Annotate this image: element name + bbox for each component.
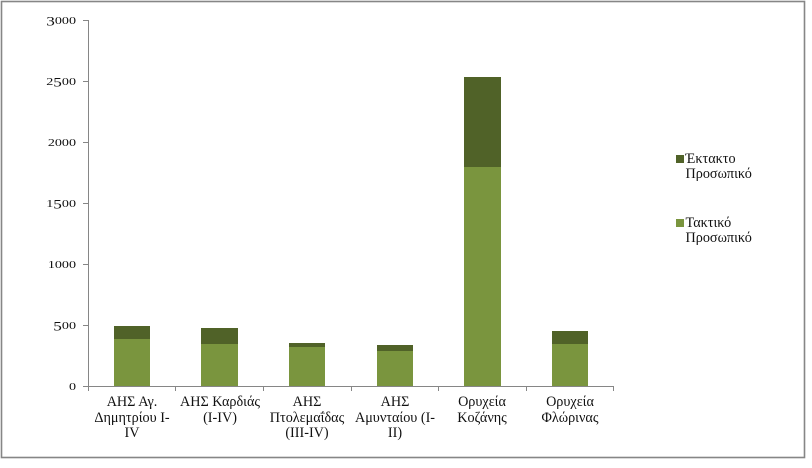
y axis labels: 00 — [62, 320, 76, 331]
label: ΑΗΣ Καρδιάς (I-IV): (I-IV) — [203, 410, 237, 426]
legend item: Τακτικό Προσωπικό — [676, 215, 752, 246]
bar: Ορυχεία Κοζάνης — [464, 77, 501, 386]
y axis labels: 2 — [46, 76, 53, 87]
y axis labels: 5 — [53, 199, 62, 212]
legend — [676, 151, 752, 246]
label: Ορυχεία Φλώρινας: Φλώρινας — [542, 410, 599, 426]
label: ΑΗΣ Αμυνταίου (I-II): ΑΗΣ — [381, 394, 409, 410]
legend item: Έκτακτο Προσωπικό: Έκτακτο — [684, 151, 736, 167]
y axis labels: 5 — [53, 321, 62, 334]
label: ΑΗΣ Πτολεμαΐδας (III-IV): Πτολεμαΐδας — [270, 410, 345, 426]
x axis labels — [94, 394, 599, 441]
bar: ΑΗΣ Πτολεμαΐδας — [289, 343, 325, 386]
label: Ορυχεία Κοζάνης: Κοζάνης — [457, 410, 507, 426]
y axis labels: 00 — [62, 76, 76, 87]
y axis labels: 0 — [69, 381, 76, 392]
label: ΑΗΣ Αμυνταίου (I-II): II) — [388, 425, 402, 441]
label: Ορυχεία Φλώρινας: Ορυχεία — [546, 394, 594, 410]
y axis labels: 1000 — [48, 259, 76, 270]
legend item: Έκτακτο Προσωπικό: Προσωπικό — [686, 166, 752, 182]
legend item: Τακτικό Προσωπικό: Τακτικό — [686, 215, 731, 231]
legend item: Τακτικό Προσωπικό: Προσωπικό — [686, 230, 752, 246]
label: ΑΗΣ Πτολεμαΐδας (III-IV): (III-IV) — [285, 425, 329, 441]
bar: Ορυχεία Φλώρινας — [552, 331, 588, 386]
bar: ΑΗΣ Αγ. Δημητρίου — [114, 326, 150, 386]
y axis labels: 000 — [55, 15, 76, 26]
label: ΑΗΣ Αγ. Δημητρίου I-IV: IV — [125, 425, 140, 441]
y axis labels — [46, 15, 76, 392]
label: ΑΗΣ Πτολεμαΐδας (III-IV): ΑΗΣ — [293, 394, 321, 410]
y axis labels: 2000 — [48, 137, 76, 148]
label: ΑΗΣ Καρδιάς (I-IV): ΑΗΣ Καρδιάς — [180, 394, 260, 410]
bar: ΑΗΣ Αμυνταίου — [377, 345, 413, 386]
bars — [114, 77, 588, 386]
legend item: Έκτακτο Προσωπικό — [676, 151, 752, 182]
y axis labels: 00 — [62, 198, 76, 209]
y axis — [83, 20, 88, 386]
y axis labels: 5 — [53, 77, 62, 90]
x axis — [83, 386, 614, 391]
y axis labels: 1 — [46, 198, 53, 209]
label: Ορυχεία Κοζάνης: Ορυχεία — [458, 394, 506, 410]
y axis labels: 3 — [46, 16, 55, 29]
label: ΑΗΣ Αγ. Δημητρίου I-IV: Δημητρίου I- — [94, 410, 170, 426]
label: ΑΗΣ Αμυνταίου (I-II): Αμυνταίου (I- — [355, 410, 435, 426]
bar: ΑΗΣ Καρδιάς — [201, 328, 238, 386]
label: ΑΗΣ Αγ. Δημητρίου I-IV: ΑΗΣ Αγ. — [107, 394, 157, 410]
